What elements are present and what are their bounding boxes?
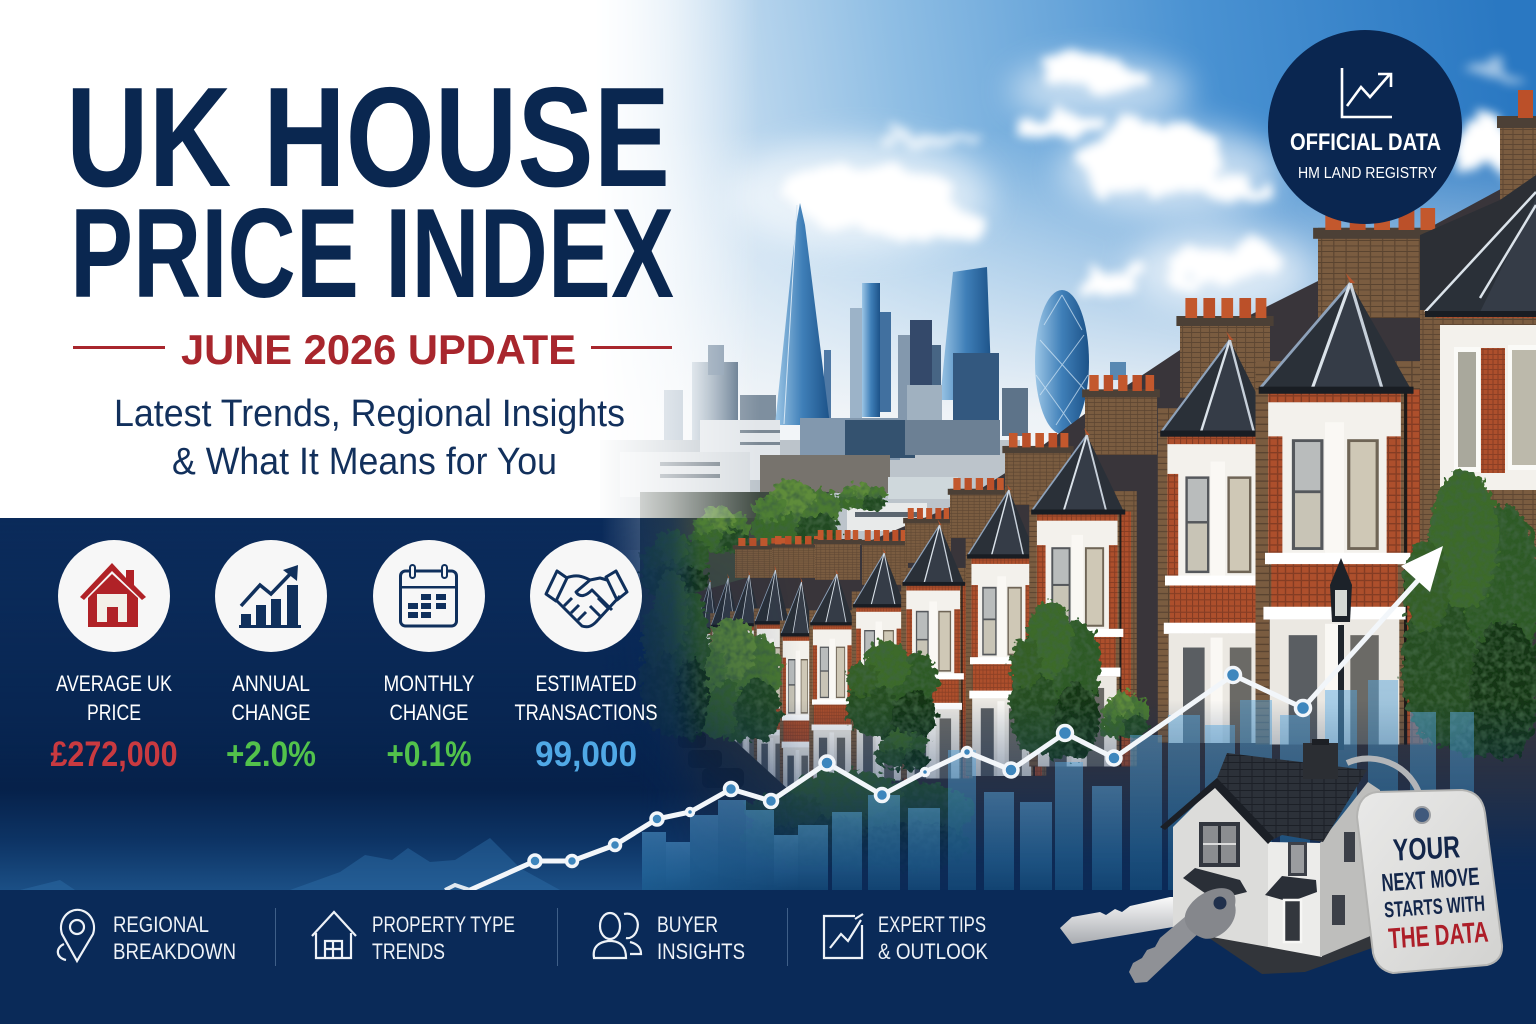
key tag with message: YOUR: [1392, 829, 1461, 868]
stat: monthly change: +0.1%: [386, 735, 472, 774]
key tag with message: STARTS WITH: [1383, 891, 1486, 923]
bar chart overlay: [642, 680, 1474, 890]
footer dividers: [275, 908, 788, 966]
title: [66, 58, 674, 324]
skyline: distant towers: [664, 203, 1126, 455]
stat: estimated transactions: 99,000: [535, 735, 637, 774]
stat: estimated transactions: TRANSACTIONS: [514, 700, 658, 725]
icon: map pin: [58, 910, 94, 961]
stat: monthly change: MONTHLY: [384, 671, 475, 696]
title: UK HOUSE: [66, 58, 670, 217]
key tag with message: [1347, 759, 1502, 973]
stat: average UK price: [50, 540, 178, 774]
icon: calendar: [400, 565, 457, 626]
far terraces: [694, 530, 910, 810]
tagline: Latest Trends, Regional Insights: [114, 393, 625, 435]
clouds: [730, 52, 1536, 310]
stat: annual change: [215, 540, 327, 774]
icon: handshake: [546, 571, 627, 627]
stat: average UK price: PRICE: [87, 700, 141, 725]
street lamp: [1330, 558, 1352, 750]
icon: outline house: [312, 912, 356, 958]
stat: monthly change: CHANGE: [390, 700, 468, 725]
white intro panel backdrop: [0, 0, 760, 518]
model house: [1160, 739, 1380, 974]
footer item: regional breakdown: [58, 910, 236, 964]
stat: estimated transactions: ESTIMATED: [536, 671, 636, 696]
street and parked cars: [660, 700, 800, 800]
line chart with rising arrow: [445, 546, 1443, 890]
stat: annual change: ANNUAL: [232, 671, 310, 696]
tag ring: [1347, 759, 1423, 812]
foreground house: right edge: [1420, 175, 1536, 590]
icon: red house: [80, 563, 146, 627]
footer item: buyer insights: BUYER: [657, 912, 718, 937]
navy stats panel backdrop: [0, 518, 700, 890]
stat: average UK price: AVERAGE UK: [56, 671, 172, 696]
badge: official data: [1268, 30, 1462, 224]
terraced houses row: [660, 90, 1536, 895]
stat: annual change: CHANGE: [232, 700, 310, 725]
footer item: buyer insights: [594, 912, 745, 964]
icon: trend chart: [1342, 68, 1392, 117]
footer item: expert tips and outlook: EXPERT TIPS: [878, 912, 986, 937]
footer item: buyer insights: INSIGHTS: [657, 939, 745, 964]
key tag with message: THE DATA: [1387, 917, 1489, 955]
footer item: regional breakdown: BREAKDOWN: [113, 939, 236, 964]
icon: rising bars: [239, 565, 301, 628]
near terraces: [809, 90, 1536, 788]
footer item: expert tips and outlook: & OUTLOOK: [878, 939, 988, 964]
trees: front of terrace: [641, 470, 1536, 870]
footer item: regional breakdown: REGIONAL: [113, 912, 209, 937]
footer band: [0, 890, 1536, 1024]
stat: monthly change: [373, 540, 485, 774]
mountain-like glow motif: [20, 838, 560, 890]
badge: official data: HM LAND REGISTRY: [1298, 165, 1437, 182]
footer item: property type trends: [312, 912, 515, 964]
keys: front key: [1129, 888, 1236, 983]
subtitle: June 2026 update: JUNE 2026 UPDATE: [181, 326, 576, 373]
footer item: property type trends: TRENDS: [372, 939, 445, 964]
subtitle: June 2026 update: [73, 326, 672, 373]
photo fade to navy at the bottom: [640, 700, 1536, 895]
footer item: expert tips and outlook: [824, 912, 988, 964]
trees: mid-distance: [641, 479, 886, 600]
badge: official data: OFFICIAL DATA: [1290, 129, 1441, 156]
stat: average UK price: £272,000: [50, 735, 178, 774]
panel lower shading: [0, 568, 792, 890]
stat: estimated transactions: [514, 540, 658, 774]
tagline: [114, 393, 625, 483]
city: low-rise midground: [600, 418, 1020, 632]
icon: report chart: [824, 914, 863, 958]
footer item: property type trends: PROPERTY TYPE: [372, 912, 515, 937]
tagline: & What It Means for You: [172, 441, 557, 483]
background: sky gradient: [500, 0, 1536, 620]
key tag with message: NEXT MOVE: [1381, 863, 1480, 897]
title: PRICE INDEX: [70, 182, 674, 324]
icon: buyers: [594, 913, 641, 958]
keys: rear key: [1060, 897, 1190, 944]
stat: annual change: +2.0%: [226, 735, 316, 774]
